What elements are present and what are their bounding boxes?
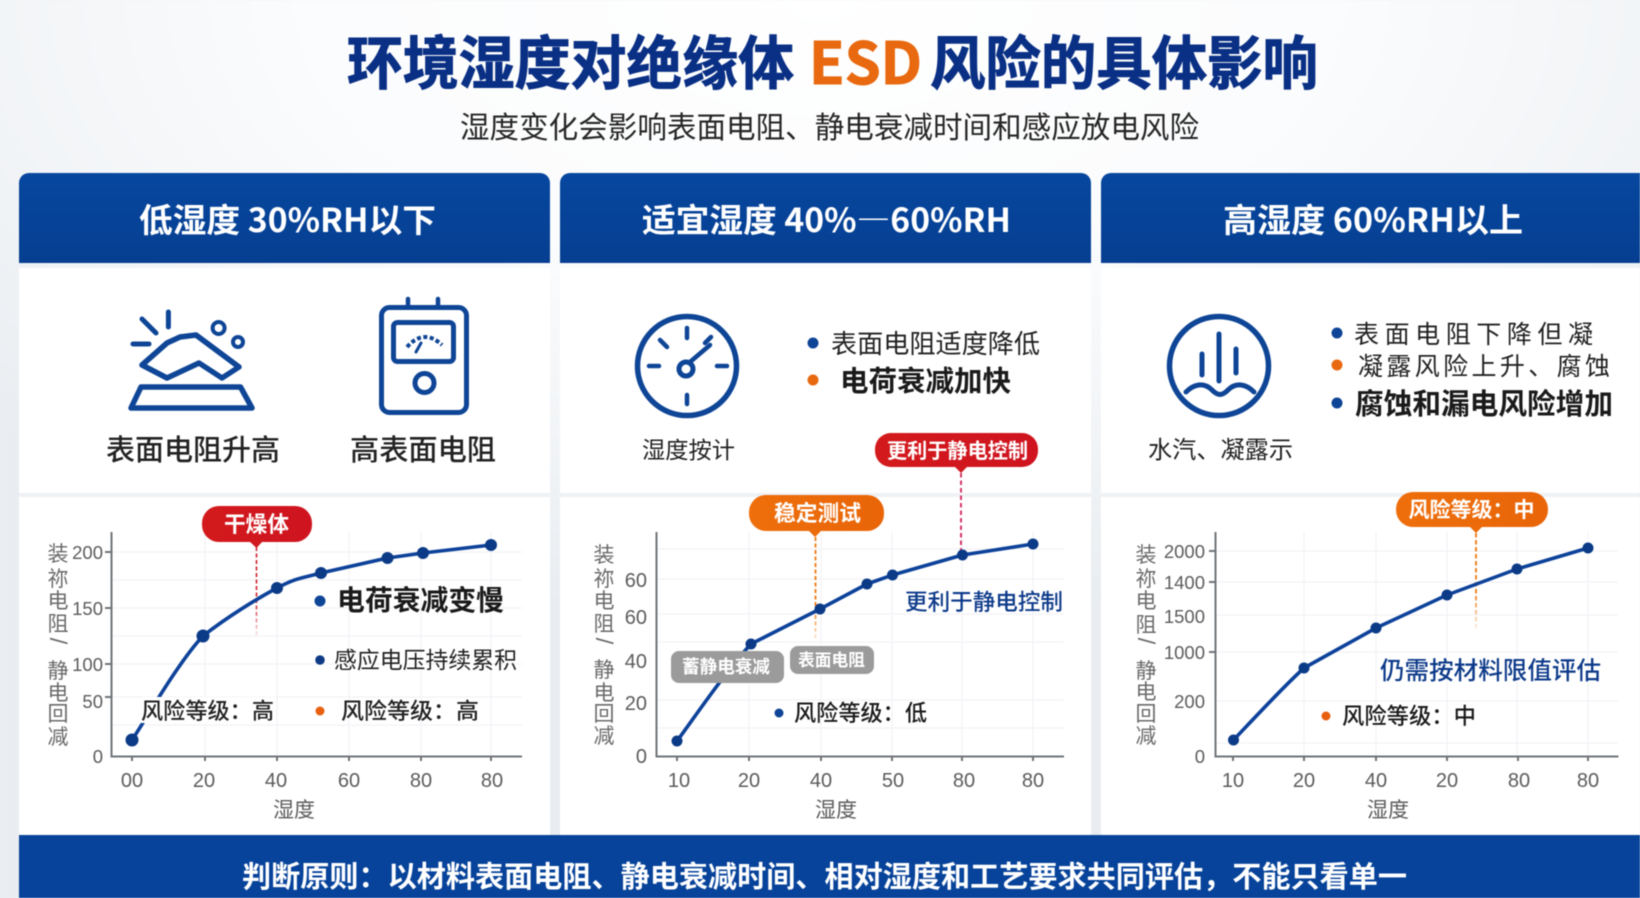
x axis title: 湿度 <box>273 794 315 824</box>
y tick labels <box>72 542 103 767</box>
x tick labels: 20 <box>1436 770 1458 792</box>
x tick labels: 50 <box>882 770 904 792</box>
y axis title <box>590 544 617 748</box>
note: assess per material limit: 仍需按材料限值评估 <box>1380 652 1601 687</box>
note: charge decay slows: 电荷衰减变慢 <box>337 579 504 619</box>
y tick labels: 200 <box>1174 691 1205 712</box>
y axis title: 静 <box>48 660 68 683</box>
icon label: hygrometer: 湿度按计 <box>642 431 735 465</box>
bullet list: 电荷衰减加快 <box>840 359 1011 400</box>
x tick labels: 60 <box>338 770 360 792</box>
y tick labels: 0 <box>636 746 647 768</box>
note: induced voltage accumulates: 感应电压持续累积 <box>334 641 517 675</box>
x axis title: 湿度 <box>1367 794 1409 824</box>
footer banner: 判断原则：以材料表面电阻、静电衰减时间、相对湿度和工艺要求共同评估，不能只看单一 <box>242 854 1407 896</box>
x tick labels <box>668 770 1044 792</box>
subtitle: 湿度变化会影响表面电阻、静电衰减时间和感应放电风险 <box>460 103 1199 147</box>
y tick labels: 200 <box>72 542 103 563</box>
y axis title: / <box>1132 638 1159 645</box>
dashed marker: stable test <box>814 537 816 642</box>
x tick labels: 80 <box>953 770 975 792</box>
y tick labels: 1400 <box>1164 572 1205 593</box>
risk level high: 风险等级：高 <box>341 694 479 726</box>
x tick labels: 80 <box>1022 770 1044 792</box>
x tick labels: 40 <box>265 770 287 792</box>
y axis title: / <box>44 638 71 645</box>
callout: stable test: 稳定测试 <box>774 496 861 528</box>
y axis title: 静 <box>594 659 614 682</box>
data curve <box>132 545 491 740</box>
y tick labels: 150 <box>72 598 103 619</box>
x tick labels: 80 <box>481 770 503 792</box>
note: favourable for ESD control: 更利于静电控制 <box>905 584 1063 617</box>
risk label on curve: 风险等级：高 <box>141 694 274 726</box>
footer banner <box>19 835 1640 898</box>
risk level low: 风险等级：低 <box>794 696 927 728</box>
y tick labels: 2000 <box>1164 541 1205 562</box>
y axis title: 回 <box>594 703 614 726</box>
panel: high humidity <box>1101 173 1640 835</box>
bullet list: 凝露风险上升、腐蚀 <box>1358 347 1610 383</box>
x tick labels: 00 <box>121 770 143 792</box>
header: suitable humidity: 适宜湿度 40%—60%RH <box>642 194 1011 242</box>
callout: risk medium: 风险等级：中 <box>1408 494 1534 524</box>
x tick labels: 20 <box>738 770 760 792</box>
icon: resistance meter <box>382 299 466 412</box>
dashed marker <box>256 547 258 637</box>
y tick labels: 20 <box>625 693 647 715</box>
data points <box>672 538 1038 746</box>
header: low humidity: 低湿度 30%RH以下 <box>139 194 436 242</box>
y axis title: 装 <box>594 544 614 567</box>
y axis title: 电 <box>594 682 614 705</box>
x tick labels: 40 <box>1365 770 1387 792</box>
y tick labels <box>625 570 647 768</box>
tag: static decay <box>671 651 784 683</box>
bullet list <box>808 324 1040 400</box>
bullet list: 表面电阻下降但凝 <box>1354 315 1593 351</box>
y axis title: 祢 <box>594 568 614 591</box>
header: suitable humidity <box>560 173 1091 263</box>
y tick labels: 0 <box>1195 746 1205 767</box>
chart: low humidity curve <box>44 506 522 824</box>
y axis title: 电 <box>594 590 614 613</box>
x tick labels: 20 <box>193 770 215 792</box>
column body <box>19 268 550 835</box>
section divider <box>560 493 1091 497</box>
y tick labels: 1000 <box>1164 642 1205 663</box>
y axis title <box>1132 544 1159 748</box>
icon label: high surface resistance: 高表面电阻 <box>350 427 496 469</box>
x axis title: 湿度 <box>815 794 857 824</box>
y axis title: 阻 <box>1136 614 1156 637</box>
y axis title: 减 <box>594 725 614 748</box>
x tick labels: 80 <box>410 770 432 792</box>
y axis title: / <box>590 638 617 645</box>
callout: risk medium <box>1396 492 1548 533</box>
y tick labels <box>1164 541 1205 767</box>
callout: favourable for ESD control: 更利于静电控制 <box>887 434 1028 464</box>
title: 环境湿度对绝缘体 <box>347 17 794 101</box>
y axis title: 减 <box>1136 725 1156 748</box>
dashed marker: favourable <box>960 473 962 553</box>
chart axes <box>656 532 1064 761</box>
icon: water vapour <box>1170 316 1268 416</box>
column body <box>1101 268 1640 835</box>
y tick labels: 50 <box>82 691 103 712</box>
y axis title: 减 <box>48 726 68 749</box>
callout: dry <box>202 506 312 548</box>
y tick labels: 0 <box>93 746 103 767</box>
x tick labels: 80 <box>1508 770 1530 792</box>
dashed marker: risk <box>1475 533 1477 630</box>
y tick labels: 1500 <box>1164 606 1205 627</box>
y axis title: 电 <box>1136 590 1156 613</box>
y axis title: 装 <box>1136 544 1156 567</box>
y axis title: 祢 <box>1136 568 1156 591</box>
data points <box>1228 542 1594 746</box>
callout: dry: 干燥体 <box>224 507 289 539</box>
bullet list: 腐蚀和漏电风险增加 <box>1355 382 1613 423</box>
header: high humidity: 高湿度 60%RH以上 <box>1223 194 1523 242</box>
y axis title: 静 <box>1136 660 1156 683</box>
x tick labels: 40 <box>810 770 832 792</box>
data curve <box>1234 548 1588 740</box>
icon label: surface resistance rises: 表面电阻升高 <box>106 427 280 469</box>
y tick labels: 60 <box>625 607 647 629</box>
x tick labels: 80 <box>1577 770 1599 792</box>
chart: suitable humidity curve <box>590 433 1064 824</box>
title: 风险的具体影响 <box>930 17 1318 101</box>
y axis title: 祢 <box>48 568 68 591</box>
chart axes <box>1209 532 1618 761</box>
x tick labels: 10 <box>1222 770 1244 792</box>
chart: high humidity curve <box>1132 492 1618 824</box>
title <box>347 17 1318 101</box>
y axis title: 回 <box>48 703 68 726</box>
panel: low humidity <box>19 173 550 835</box>
bullet list: 表面电阻适度降低 <box>831 324 1040 361</box>
risk level medium: 风险等级：中 <box>1342 699 1476 731</box>
y axis title: 回 <box>1136 703 1156 726</box>
y axis title: 电 <box>1136 681 1156 704</box>
y tick labels: 60 <box>625 570 647 592</box>
icon: hygrometer dial <box>638 316 736 416</box>
header: low humidity <box>19 173 550 263</box>
title: ESD <box>809 17 922 101</box>
x tick labels <box>1222 770 1599 792</box>
y tick labels: 100 <box>72 654 103 675</box>
data curve <box>677 544 1033 741</box>
icon label: vapour and condensation: 水汽、凝露示 <box>1148 430 1293 465</box>
tag: surface resistance: 表面电阻 <box>798 646 865 671</box>
y axis title <box>44 543 71 749</box>
tag: static decay: 蓄静电衰减 <box>682 653 770 679</box>
x tick labels: 10 <box>668 770 690 792</box>
section divider <box>19 493 550 497</box>
data points <box>126 539 497 746</box>
callout: favourable for ESD control <box>875 433 1038 473</box>
panel: suitable humidity <box>560 173 1091 835</box>
chart axes <box>105 532 522 761</box>
bullet list <box>1332 315 1613 423</box>
x tick labels <box>121 770 503 792</box>
section divider <box>1101 493 1640 497</box>
y axis title: 电 <box>48 682 68 705</box>
x tick labels: 20 <box>1293 770 1315 792</box>
y axis title: 装 <box>48 543 68 566</box>
column body <box>560 268 1091 835</box>
y axis title: 阻 <box>48 613 68 636</box>
y tick labels: 40 <box>625 651 647 673</box>
y axis title: 阻 <box>594 613 614 636</box>
icon: dry surface <box>131 312 252 408</box>
header: high humidity <box>1101 173 1640 263</box>
y axis title: 电 <box>48 590 68 613</box>
callout: stable test <box>749 495 884 537</box>
